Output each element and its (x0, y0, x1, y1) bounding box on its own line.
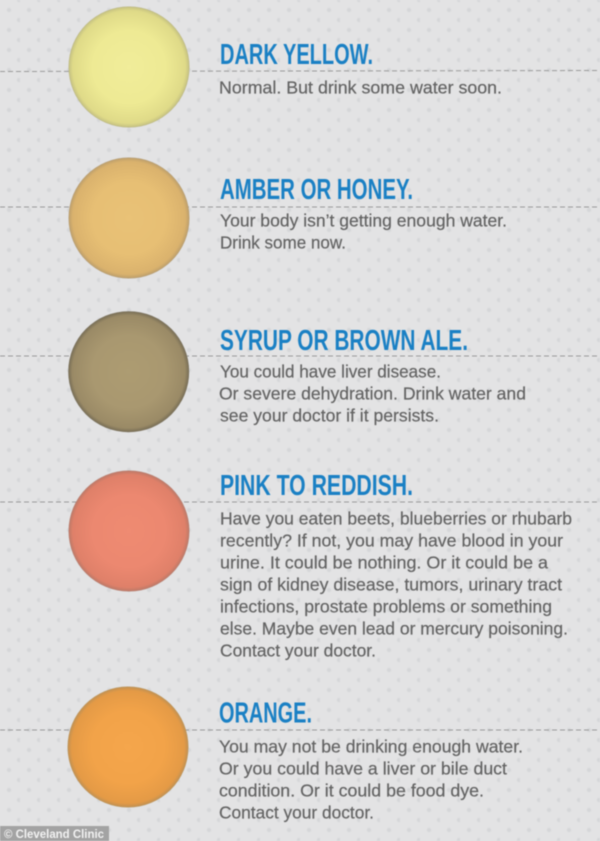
item: syrup or brown ale (0, 311, 600, 432)
item: pink to reddish (0, 470, 600, 660)
item: dark yellow (0, 6, 600, 128)
item: orange (0, 686, 600, 822)
text: syrup description (219, 362, 526, 426)
text: amber description: Drink some now. (220, 232, 346, 252)
text: pink description: sign of kidney disease, tumors, urinary tract (220, 574, 562, 594)
swatch: pink (68, 470, 190, 592)
swatch: syrup (68, 311, 189, 432)
text: amber description: Your body isn’t getting enough water. (220, 210, 507, 230)
item: amber or honey (0, 158, 600, 278)
text: orange description: condition. Or it could be food dye. (219, 780, 484, 800)
heading: syrup or brown ale: SYRUP OR BROWN ALE. (220, 325, 468, 357)
text: orange description: Or you could have a liver or bile duct (219, 758, 507, 778)
text: syrup description: see your doctor if it persists. (220, 406, 439, 426)
heading: pink to reddish: PINK TO REDDISH. (220, 470, 413, 502)
credit: Cleveland Clinic: © Cleveland Clinic (4, 827, 104, 841)
text: pink description: Contact your doctor. (220, 640, 376, 660)
text: pink description: recently? If not, you may have blood in your (220, 530, 563, 550)
text: pink description: else. Maybe even lead or mercury poisoning. (220, 618, 568, 638)
text: orange description: You may not be drinking enough water. (219, 736, 523, 756)
swatch: amber (68, 158, 190, 278)
heading: amber or honey: AMBER OR HONEY. (220, 174, 413, 206)
heading: dark yellow: DARK YELLOW. (220, 39, 373, 71)
text: orange description (219, 736, 523, 822)
text: dark yellow description: Normal. But drink some water soon. (219, 78, 502, 98)
text: syrup description: Or severe dehydration. Drink water and (219, 384, 526, 404)
text: pink description: urine. It could be nothing. Or it could be a (220, 552, 548, 572)
heading: orange: ORANGE. (219, 698, 312, 730)
text: amber description (220, 210, 507, 252)
swatch: orange (68, 686, 188, 808)
text: syrup description: You could have liver disease. (220, 362, 441, 382)
text: pink description: infections, prostate problems or something (220, 596, 552, 616)
text: pink description (220, 508, 572, 660)
swatch: dark yellow (68, 6, 190, 128)
text: orange description: Contact your doctor. (219, 802, 374, 822)
text: pink description: Have you eaten beets, blueberries or rhubarb (220, 508, 572, 528)
